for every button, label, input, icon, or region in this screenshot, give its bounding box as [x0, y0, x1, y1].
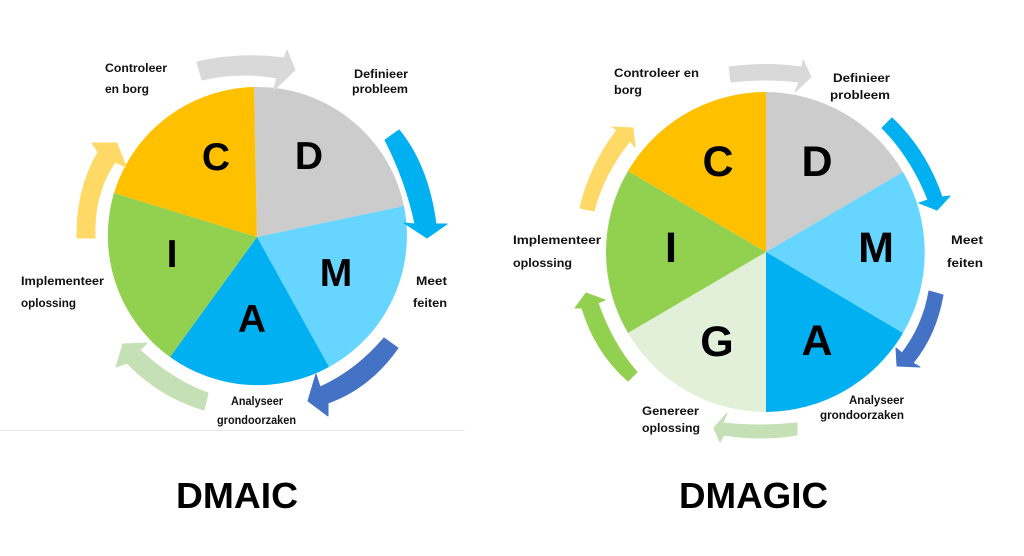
label: Implementeer oplossing: oplossing — [513, 258, 572, 270]
label: Meet feiten: Meet — [416, 276, 447, 288]
segment: D — [766, 92, 903, 252]
segment: I — [108, 193, 257, 357]
label: Analyseer grondoorzaken — [820, 395, 905, 422]
arrow: yellow, I to C — [77, 143, 126, 238]
segment: C — [628, 92, 766, 252]
label: Implementeer oplossing — [513, 235, 602, 270]
label: Analyseer grondoorzaken: Analyseer — [849, 395, 905, 407]
label: Definieer probleem — [830, 73, 891, 102]
pie chart: DMAGIC — [606, 92, 925, 412]
segment: M — [257, 206, 407, 367]
letter: I: I — [665, 224, 677, 272]
label: Meet feiten: Meet — [951, 235, 983, 247]
label: Implementeer oplossing — [21, 276, 105, 310]
label: Controleer en borg: Controleer en — [614, 68, 699, 80]
arrow: blue, D to M — [385, 130, 447, 238]
segment: A — [170, 237, 329, 385]
arrow: green, G to I — [575, 293, 637, 381]
label: Definieer probleem — [352, 69, 409, 96]
pie chart: DMAIC — [108, 87, 407, 385]
label: Analyseer grondoorzaken: grondoorzaken — [217, 415, 296, 427]
label: Meet feiten — [413, 276, 447, 310]
segment: G — [628, 252, 766, 412]
letter: A: A — [238, 298, 266, 341]
label: Analyseer grondoorzaken: Analyseer — [231, 396, 283, 408]
label: Definieer probleem: probleem — [830, 90, 890, 102]
title: DMAGIC: DMAGIC — [679, 475, 828, 516]
letter: D: D — [295, 135, 323, 178]
arrow: dark blue, M to A — [308, 338, 398, 416]
label: Genereer oplossing: oplossing — [642, 423, 700, 435]
label: Definieer probleem: Definieer — [354, 69, 409, 81]
letter: G: G — [700, 318, 734, 366]
letter: I: I — [167, 233, 177, 276]
letter: A: A — [801, 317, 833, 365]
letter: M: M — [320, 252, 352, 295]
label: Analyseer grondoorzaken — [217, 396, 296, 427]
label: Controleer en borg: Controleer — [105, 63, 168, 75]
letter: M: M — [858, 224, 894, 272]
label: Implementeer oplossing: Implementeer — [21, 276, 105, 288]
label: Meet feiten: feiten — [947, 258, 983, 270]
arrow: yellow, I to C — [580, 127, 635, 211]
label: Analyseer grondoorzaken: grondoorzaken — [820, 410, 904, 422]
label: Implementeer oplossing: oplossing — [21, 298, 76, 310]
arrow: gray, C to D — [197, 50, 295, 91]
arrow: pale green, A to I — [116, 343, 208, 410]
label: Controleer en borg: borg — [614, 85, 642, 97]
label: Definieer probleem: probleem — [352, 84, 408, 96]
label: Meet feiten — [947, 235, 983, 270]
title: DMAIC: DMAIC — [176, 475, 298, 516]
letter: C: C — [702, 138, 734, 186]
panel: DMAIC diagram — [21, 50, 447, 516]
arrow: dark blue, M to A — [896, 291, 943, 367]
label: Implementeer oplossing: Implementeer — [513, 235, 602, 247]
label: Genereer oplossing: Genereer — [642, 406, 700, 418]
label: Controleer en borg — [105, 63, 168, 96]
label: Definieer probleem: Definieer — [833, 73, 891, 85]
letter: D: D — [801, 138, 833, 186]
label: Genereer oplossing — [642, 406, 700, 435]
arrow: gray, C to D — [729, 60, 811, 92]
label: Controleer en borg: en borg — [105, 84, 149, 96]
segment: A — [766, 252, 903, 412]
label: Meet feiten: feiten — [413, 298, 447, 310]
segment: C — [114, 87, 257, 237]
segment: M — [766, 172, 925, 333]
label: Controleer en borg — [614, 68, 699, 97]
panel: DMAGIC diagram — [513, 60, 983, 516]
segment: D — [254, 87, 404, 237]
arrow: blue, D to M — [882, 118, 950, 210]
segment: I — [606, 171, 766, 333]
letter: C: C — [202, 136, 230, 179]
arrow: pale green, A to G — [714, 413, 797, 442]
